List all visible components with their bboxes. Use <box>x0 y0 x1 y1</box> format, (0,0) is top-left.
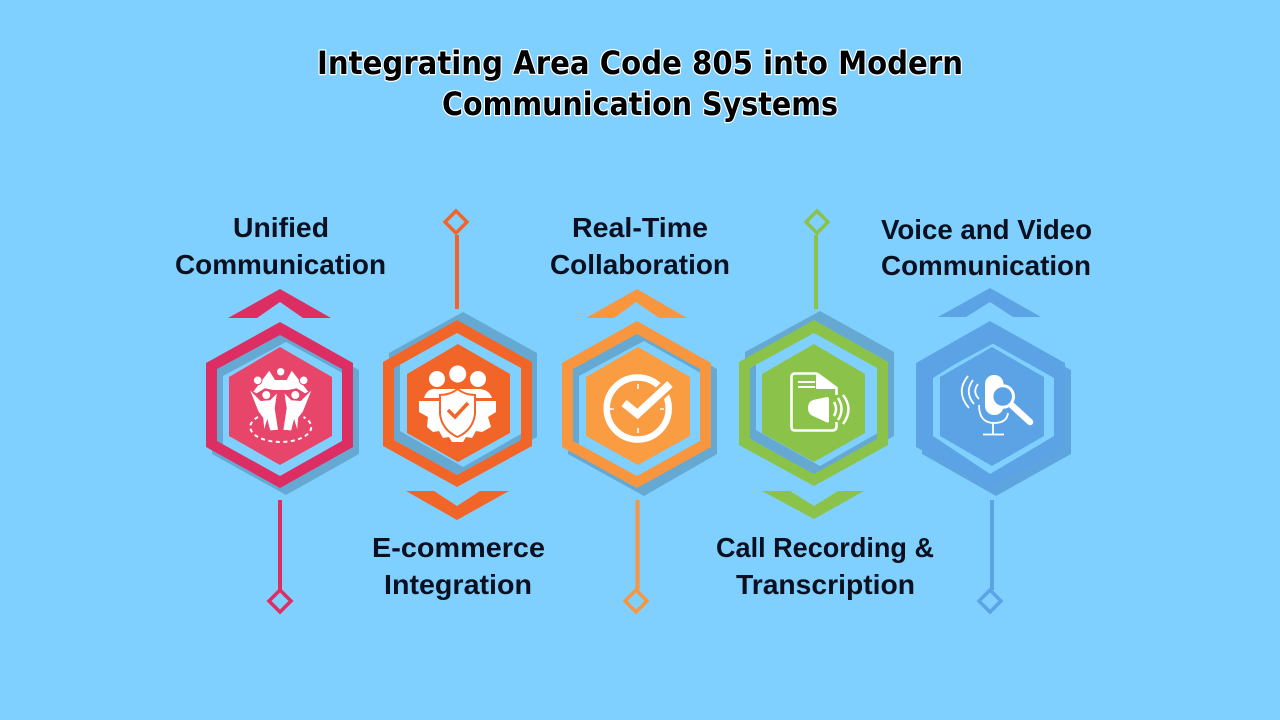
diamond: orange <box>445 211 467 233</box>
heading: unified communication: Communication <box>175 249 386 280</box>
icon: microphone with magnifier <box>962 375 1030 434</box>
hexagon: orange <box>383 312 537 487</box>
chevron: amber up <box>586 289 687 318</box>
line connector: blue <box>990 500 994 590</box>
title <box>317 44 963 123</box>
heading: voice and video communication: Voice and Video <box>881 214 1092 245</box>
icon: audio document <box>792 374 848 430</box>
line connector: amber <box>636 500 640 590</box>
line connector: orange <box>455 235 459 309</box>
icon: people group <box>249 367 312 442</box>
chevron: red up <box>228 289 331 318</box>
heading: e-commerce integration: Integration <box>384 569 532 600</box>
diamond: amber <box>625 590 647 612</box>
heading: real-time collaboration <box>550 212 730 280</box>
icon: clock with check <box>607 378 670 440</box>
hexagon: blue <box>916 321 1071 496</box>
diamond: blue <box>979 590 1001 612</box>
heading: real-time collaboration: Collaboration <box>550 249 730 280</box>
heading: e-commerce integration: E-commerce <box>372 532 545 563</box>
icon: team shield gear <box>419 366 496 442</box>
heading: real-time collaboration: Real-Time <box>572 212 708 243</box>
heading: e-commerce integration <box>372 532 545 600</box>
chevron: blue up <box>938 288 1041 317</box>
heading: unified communication <box>175 212 386 280</box>
diamond: red <box>269 590 291 612</box>
line connector: red <box>278 500 282 590</box>
hexagon: amber <box>562 321 717 496</box>
panel: unified communication <box>175 212 386 612</box>
hexagon: green <box>739 311 894 486</box>
heading: call recording and transcription <box>716 532 934 600</box>
panel: real-time collaboration <box>550 212 730 612</box>
heading: call recording and transcription: Call Recording & <box>716 532 934 563</box>
heading: voice and video communication: Communication <box>881 250 1091 281</box>
heading: voice and video communication <box>881 214 1092 281</box>
title: Integrating Area Code 805 into Modern <box>317 44 963 82</box>
heading: call recording and transcription: Transcription <box>736 569 915 600</box>
diamond: green <box>806 211 828 233</box>
chevron: green down <box>762 491 864 519</box>
hexagon: red <box>206 322 359 495</box>
title: Communication Systems <box>442 85 838 123</box>
panel: e-commerce integration <box>372 211 545 600</box>
chevron: orange down <box>406 491 509 520</box>
panel: call recording and transcription <box>716 211 934 600</box>
heading: unified communication: Unified <box>233 212 329 243</box>
line connector: green <box>814 235 818 309</box>
panel: voice and video communication <box>881 214 1092 612</box>
